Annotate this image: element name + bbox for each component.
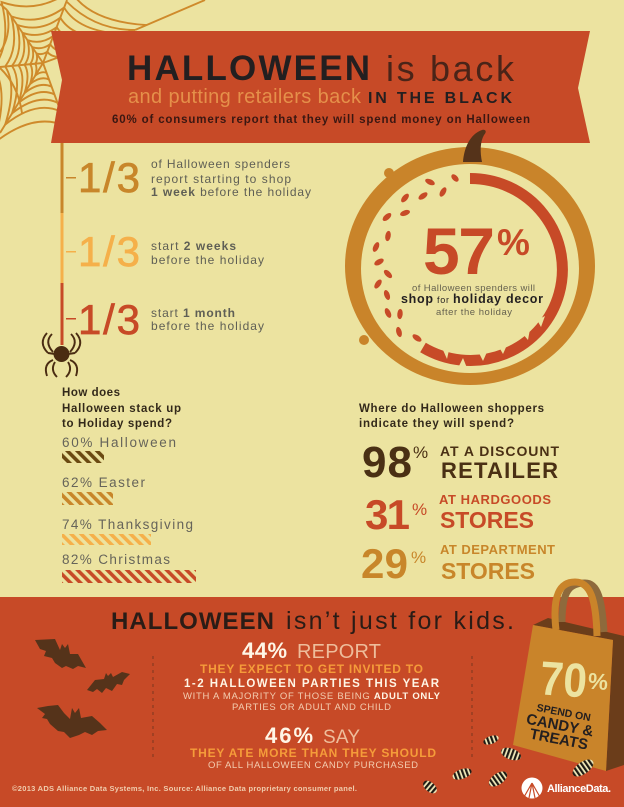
pumpkin caption: after the holiday (436, 307, 512, 318)
stat: one third 1 week: report starting to shop (151, 172, 291, 186)
pumpkin stem (463, 130, 486, 162)
stat: one third 1 week: 1/3 (78, 154, 140, 201)
heading: holiday spend: to Holiday spend? (62, 418, 172, 430)
stat: one third 2 weeks: start 2 weeks (151, 239, 236, 253)
text block: 44 percent: PARTIES OR ADULT AND CHILD (232, 702, 391, 713)
text block: 46 percent: 46% (265, 723, 313, 748)
stat: hardgoods stores: STORES (440, 507, 534, 533)
subtitle: IN THE BLACK (368, 90, 512, 107)
logo: Alliance Data: AllianceData. (547, 783, 611, 795)
bar: Easter (62, 475, 146, 505)
heading: where they spend: indicate they will spend? (359, 418, 514, 430)
bag text: TREATS (528, 726, 589, 754)
heading: holiday spend (62, 387, 181, 430)
icon: bats (35, 639, 130, 738)
pumpkin caption (401, 283, 543, 318)
bar: Halloween (62, 435, 176, 463)
title: HALLOWEEN (127, 49, 370, 88)
heading: holiday spend: Halloween stack up (62, 403, 181, 415)
stat: discount retailer: 98 (362, 438, 412, 487)
stat: department stores: % (411, 548, 426, 567)
stat: hardgoods stores: 31 (365, 491, 410, 538)
stat: department stores: 29 (361, 540, 408, 587)
bottom heading (111, 607, 514, 635)
text block: 44 percent: REPORT (297, 641, 381, 663)
bar: Halloween: 60% Halloween (62, 435, 176, 450)
stat: discount retailer: RETAILER (441, 458, 558, 483)
timeline line (60, 143, 76, 345)
bar chart: holiday spend (62, 435, 196, 583)
bar: Christmas (62, 552, 196, 583)
stat: department stores: AT DEPARTMENT (440, 542, 555, 557)
text block: 46 percent: SAY (323, 727, 360, 748)
text block: 46 percent: THEY ATE MORE THAN THEY SHOULD (190, 746, 436, 760)
subtitle: and putting retailers back (128, 86, 362, 108)
title: is back (386, 48, 515, 89)
stat: department stores (361, 540, 555, 587)
pumpkin caption: of Halloween spenders will (412, 283, 535, 294)
bag text: CANDY & (525, 711, 595, 740)
bar: Easter: 62% Easter (62, 475, 146, 490)
stat: hardgoods stores: % (412, 500, 427, 519)
title (127, 48, 515, 89)
banner (51, 31, 590, 143)
stat: one third 1 week (78, 154, 311, 201)
stat: one third 1 month (78, 296, 264, 343)
heading: where they spend (359, 403, 544, 430)
icon: spider (43, 333, 80, 377)
icon: shopping bag (513, 582, 624, 771)
bottom heading: isn’t just for kids. (286, 607, 514, 635)
bag text: 70 (538, 652, 589, 708)
57 percent: % (497, 222, 530, 263)
bar: Thanksgiving (62, 517, 193, 545)
banner statement: 60% of consumers report that they will spend money on Halloween (112, 114, 530, 126)
stat: one third 1 month: before the holiday (151, 319, 264, 333)
footer source: ©2013 ADS Alliance Data Systems, Inc. Source: Alliance Data proprietary consumer panel. (12, 784, 357, 793)
subtitle (128, 86, 512, 108)
stat: discount retailer (362, 438, 559, 487)
progress arc (423, 178, 562, 368)
stat: department stores: STORES (441, 558, 535, 584)
bottom panel (0, 597, 624, 807)
pumpkin ring (345, 147, 595, 385)
logo: Alliance Data (522, 778, 611, 798)
spider web (0, 0, 205, 144)
stat: one third 1 week: 1 week before the holiday (151, 185, 311, 199)
bag text: % (587, 668, 609, 695)
icon: candies (421, 734, 596, 796)
bar: Christmas: 82% Christmas (62, 552, 170, 567)
stat: hardgoods stores: AT HARDGOODS (439, 492, 551, 507)
text block: 46 percent: OF ALL HALLOWEEN CANDY PURCHASED (208, 760, 418, 771)
text block: 44 percent: THEY EXPECT TO GET INVITED TO (200, 662, 423, 676)
bag text: SPEND ON (536, 702, 592, 724)
text block: 46 percent (190, 723, 436, 771)
heading: where they spend: Where do Halloween shoppers (359, 403, 544, 415)
text block: 44 percent: WITH A MAJORITY OF THOSE BEING ADULT ONLY (183, 691, 441, 702)
pumpkin caption: shop for holiday decor (401, 292, 543, 306)
57 percent (423, 214, 530, 288)
stat: one third 2 weeks (78, 228, 264, 275)
stat: hardgoods stores (365, 491, 551, 538)
bag text (525, 652, 610, 754)
57 percent: 57 (423, 214, 495, 288)
text block: 44 percent (183, 638, 441, 713)
stat: one third 2 weeks: before the holiday (151, 253, 264, 267)
stat: one third 2 weeks: 1/3 (78, 228, 140, 275)
heading: holiday spend: How does (62, 387, 120, 399)
text block: 44 percent: 1-2 HALLOWEEN PARTIES THIS YEAR (184, 678, 440, 690)
seeds (371, 173, 460, 343)
stat: discount retailer: % (413, 443, 428, 462)
stat: discount retailer: AT A DISCOUNT (440, 443, 559, 459)
bottom heading: HALLOWEEN (111, 608, 274, 635)
bar: Thanksgiving: 74% Thanksgiving (62, 517, 193, 532)
stat: one third 1 month: start 1 month (151, 306, 235, 320)
pumpkin chart (345, 130, 595, 385)
stat: one third 1 month: 1/3 (78, 296, 140, 343)
stat: one third 1 week: of Halloween spenders (151, 157, 290, 171)
text block: 44 percent: 44% (242, 638, 287, 663)
